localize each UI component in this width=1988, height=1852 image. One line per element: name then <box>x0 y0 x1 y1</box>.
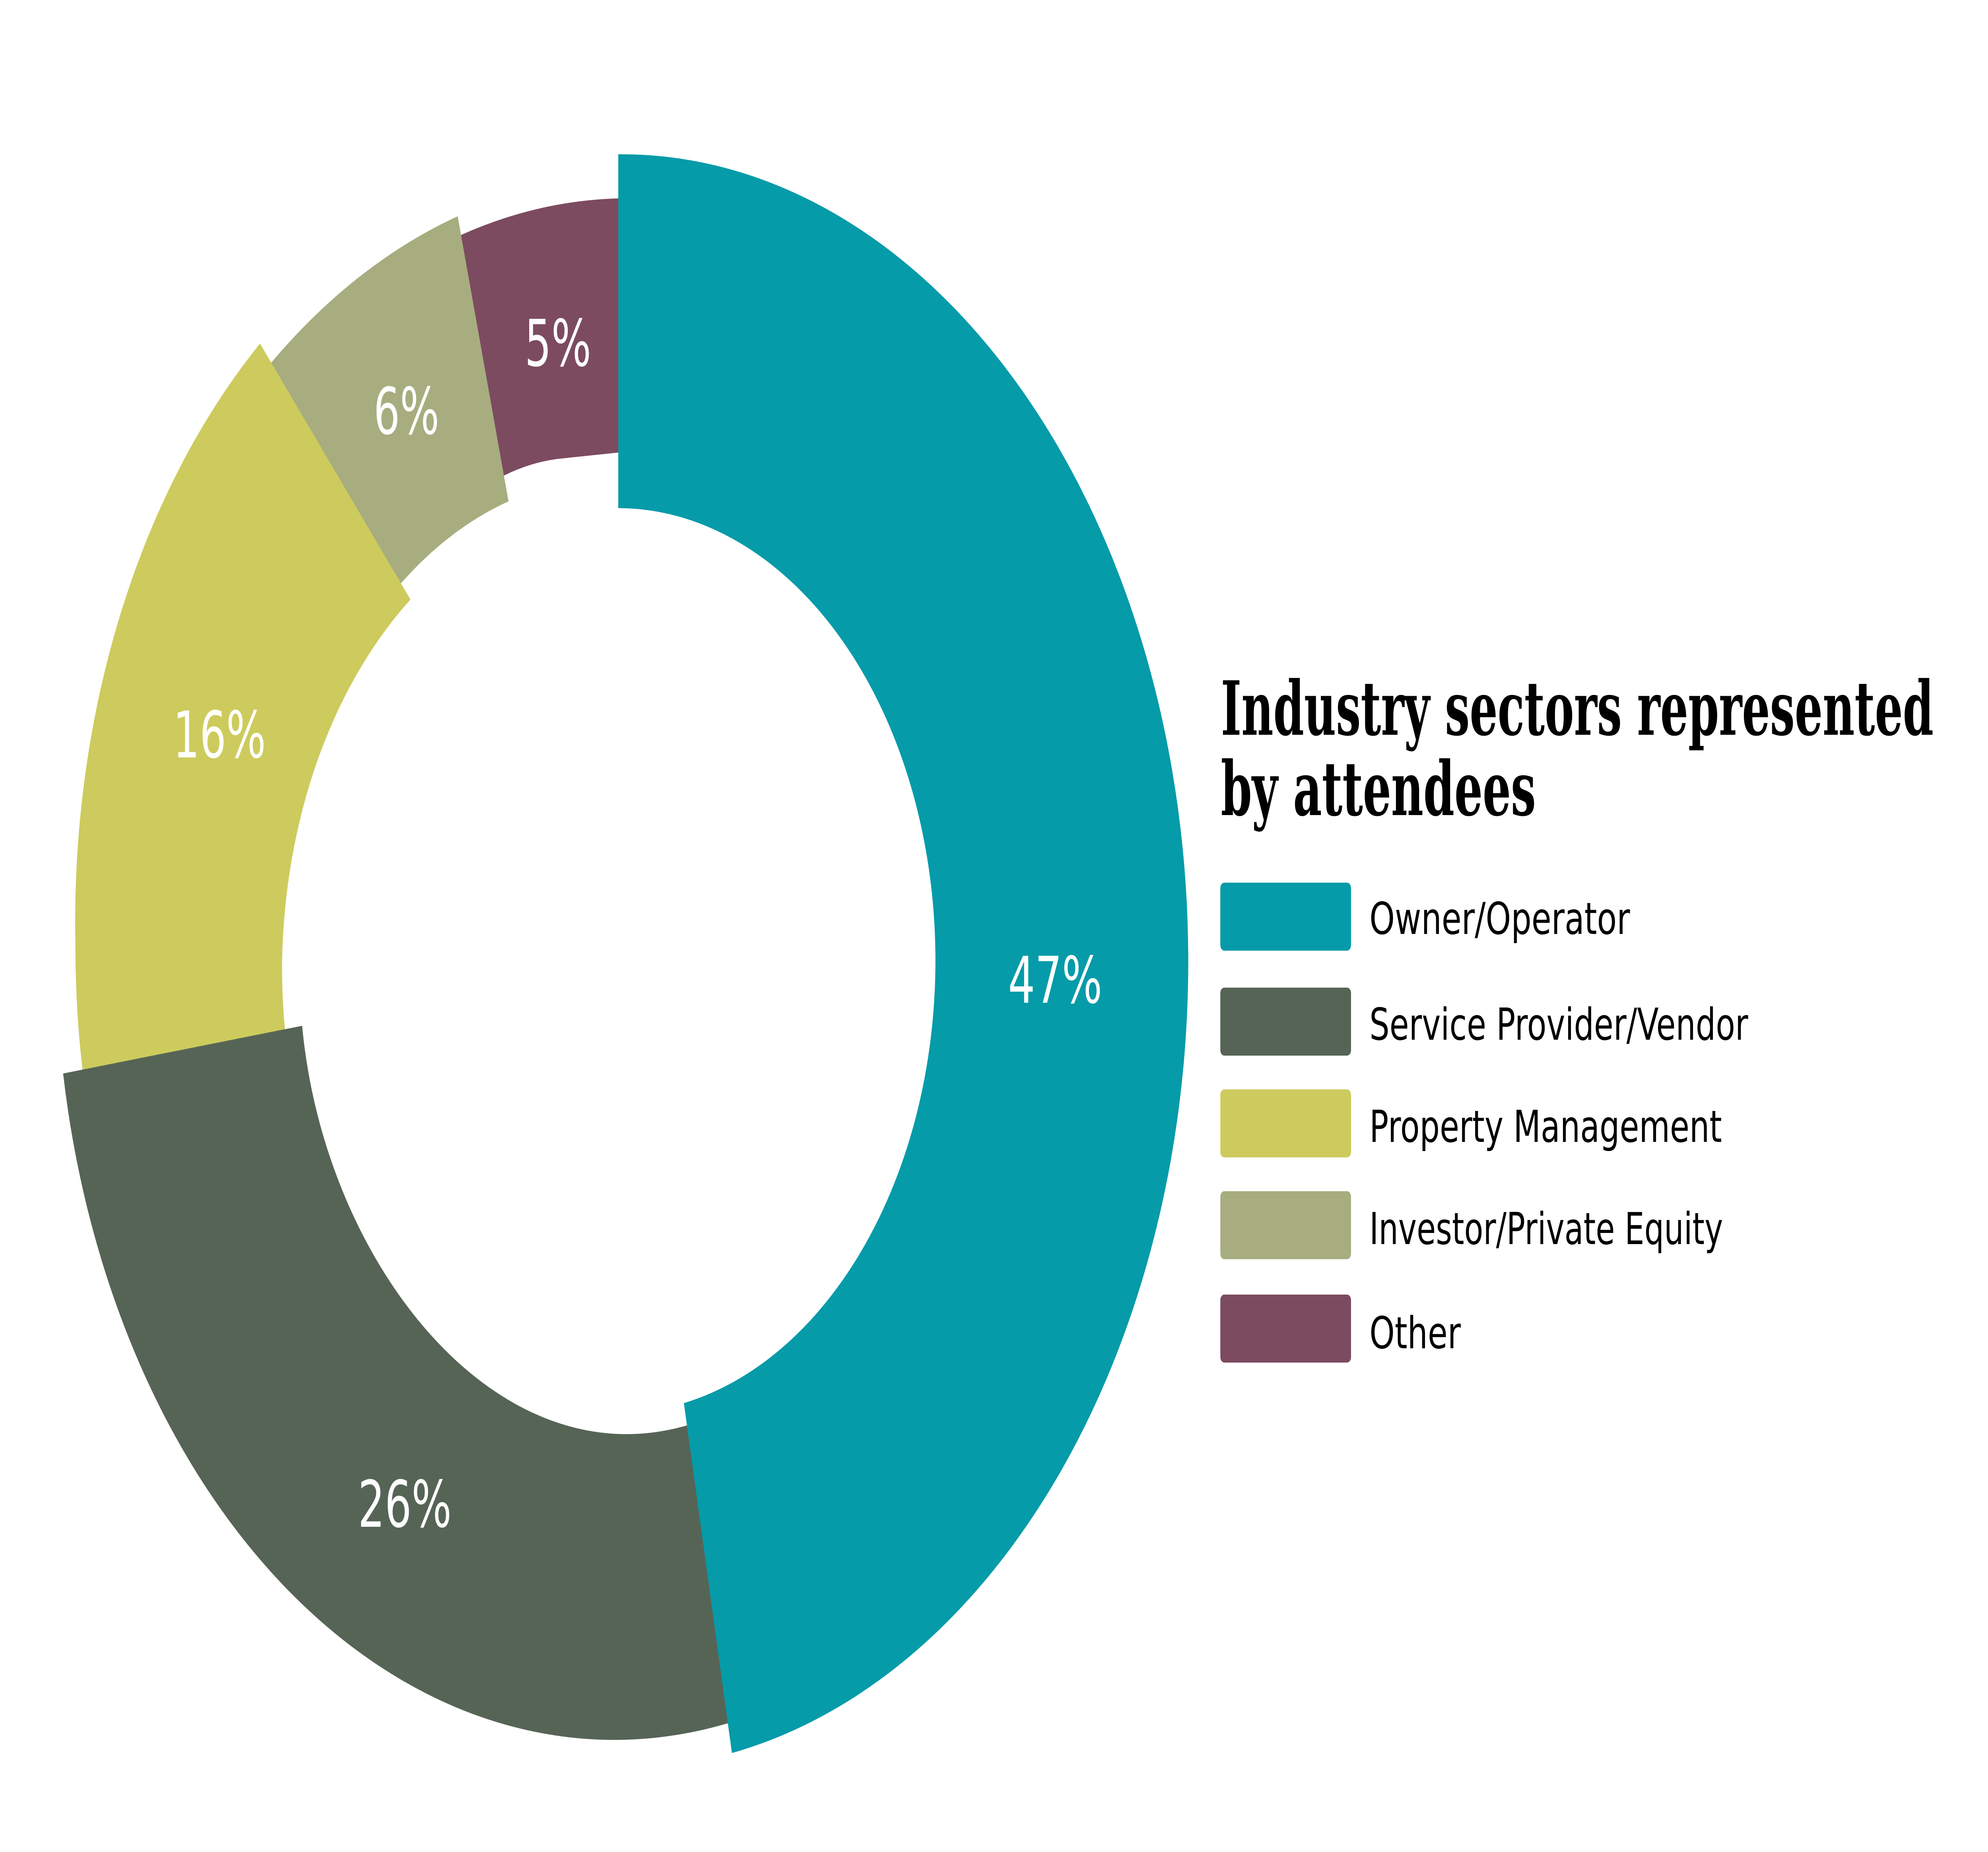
segment: Other 5% <box>458 198 623 477</box>
legend item: Investor/Private Equity: Investor/Private Equity <box>1369 1203 1723 1255</box>
donut chart <box>63 154 1188 1753</box>
label: 16%: 16% <box>173 698 266 773</box>
segment: Property Management 16% <box>75 344 410 1074</box>
title <box>1221 665 1934 833</box>
legend item: Other: Other <box>1369 1307 1461 1359</box>
legend item: Owner/Operator <box>1220 883 1630 951</box>
segment: Service Provider/Vendor 26% <box>63 1026 731 1740</box>
legend item: Owner/Operator: Owner/Operator <box>1369 893 1630 945</box>
legend item: Property Management: Property Management <box>1369 1101 1722 1153</box>
segment: Investor/Private Equity 6% <box>269 216 509 583</box>
legend <box>1220 883 1748 1363</box>
legend item: Service Provider/Vendor: Service Provider/Vendor <box>1369 999 1748 1050</box>
legend item: Service Provider/Vendor <box>1220 988 1748 1056</box>
label: 5%: 5% <box>525 307 591 381</box>
label: 6%: 6% <box>374 375 439 449</box>
legend item: Investor/Private Equity <box>1220 1191 1723 1259</box>
label: 47%: 47% <box>1008 943 1102 1018</box>
segment: Owner/Operator 47% <box>618 154 1188 1753</box>
title: by attendees <box>1221 745 1536 833</box>
legend item: Other <box>1220 1295 1461 1363</box>
label: 26%: 26% <box>358 1468 452 1542</box>
legend item: Property Management <box>1220 1089 1722 1157</box>
